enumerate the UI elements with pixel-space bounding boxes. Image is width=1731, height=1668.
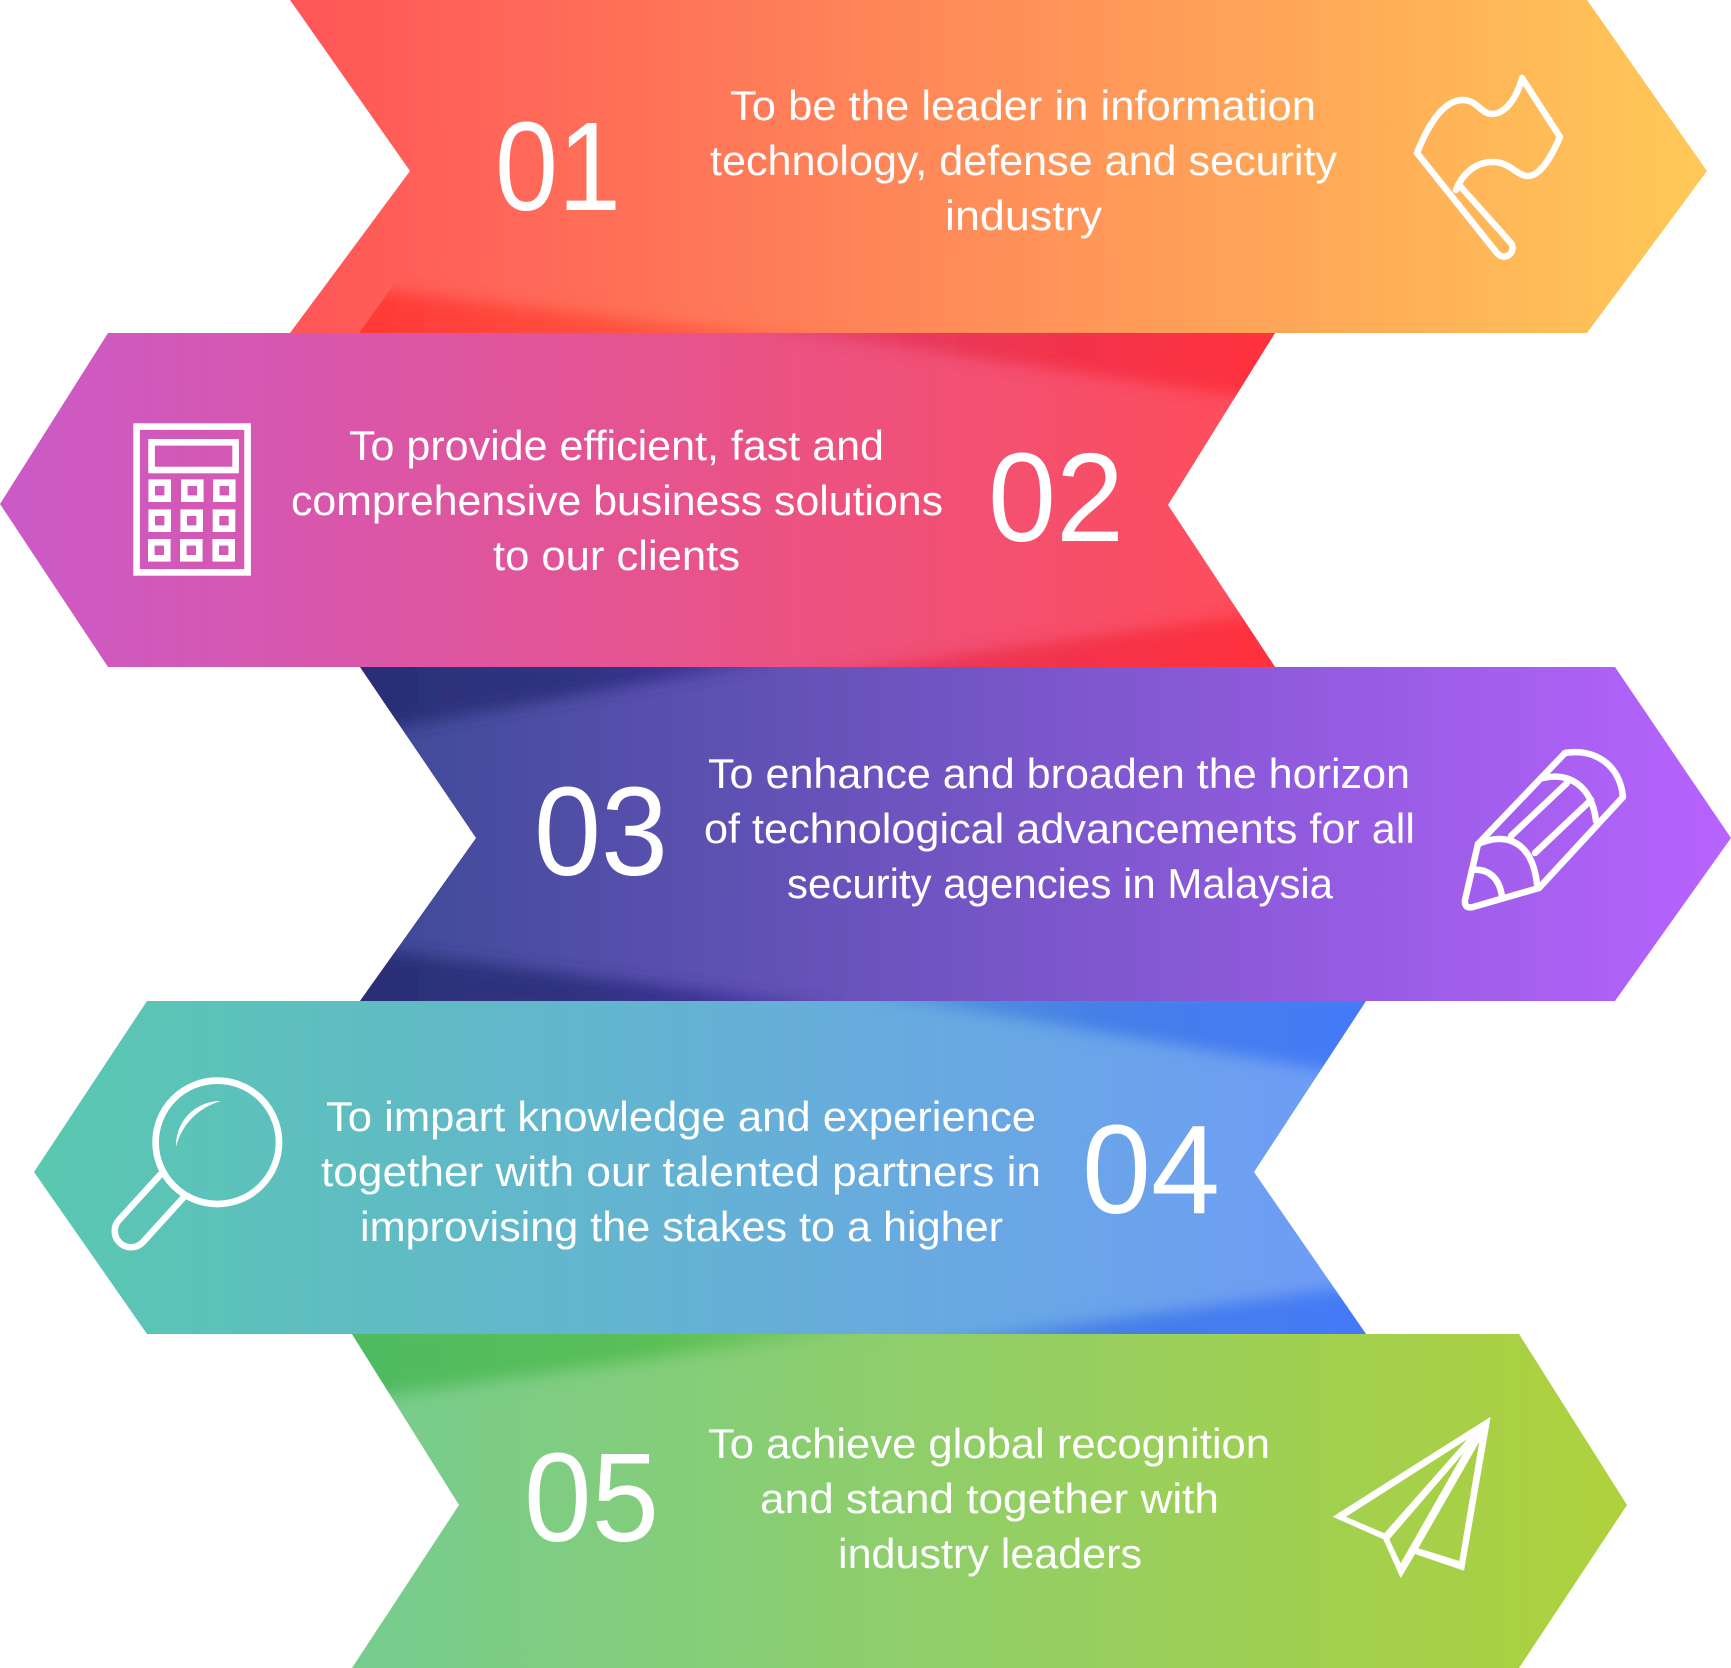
- text: mission 5: industry leaders: [838, 1530, 1142, 1577]
- text: mission 4: together with our talented partners in: [321, 1148, 1041, 1195]
- number 03: 03: [534, 761, 668, 902]
- icon: pencil: [1465, 752, 1623, 907]
- text: mission 2: [291, 422, 943, 579]
- panel: arrow 03: [340, 652, 1731, 1016]
- text: mission 3: security agencies in Malaysia: [787, 860, 1334, 907]
- text: mission 4: improvising the stakes to a higher: [360, 1203, 1003, 1250]
- text: mission 3: [704, 750, 1415, 907]
- number 05: 05: [524, 1427, 659, 1568]
- panel: arrow 05: [340, 1318, 1627, 1668]
- icon: calculator: [137, 427, 248, 572]
- text: mission 5: To achieve global recognition: [708, 1420, 1270, 1467]
- text: mission 1: To be the leader in information: [730, 82, 1316, 129]
- text: mission 3: of technological advancements for all: [704, 805, 1415, 852]
- text: mission 1: technology, defense and security: [710, 137, 1337, 184]
- panel: arrow 02: [0, 322, 1300, 684]
- text: mission 1: [710, 82, 1337, 239]
- number 02: 02: [988, 427, 1124, 568]
- text: mission 4: To impart knowledge and experience: [326, 1093, 1036, 1140]
- icon: flag: [1417, 78, 1560, 257]
- text: mission 1: industry: [945, 192, 1102, 239]
- icon: magnifying glass: [115, 1081, 279, 1247]
- icon: paper plane: [1333, 1417, 1491, 1578]
- text: mission 2: comprehensive business solutions: [291, 477, 943, 524]
- text: mission 2: to our clients: [493, 532, 740, 579]
- panel: arrow 04: [34, 990, 1390, 1350]
- number 01: 01: [495, 96, 621, 237]
- panel: arrow 01: [290, 0, 1707, 352]
- text: mission 4: [321, 1093, 1041, 1250]
- number 04: 04: [1082, 1099, 1220, 1240]
- text: mission 5: [708, 1420, 1270, 1577]
- text: mission 2: To provide efficient, fast and: [349, 422, 884, 469]
- text: mission 3: To enhance and broaden the horizon: [708, 750, 1410, 797]
- text: mission 5: and stand together with: [760, 1475, 1219, 1522]
